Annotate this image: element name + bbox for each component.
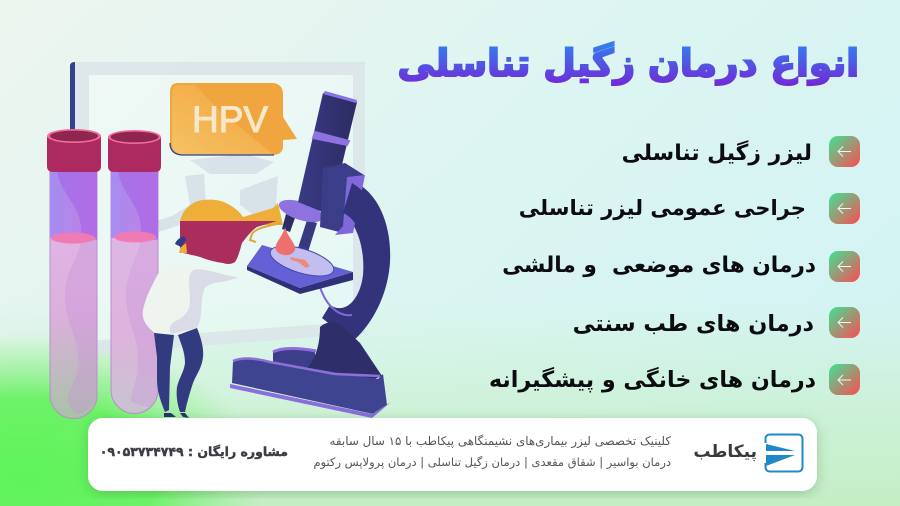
microscope tube <box>298 93 357 215</box>
list item 5: درمان های خانگی و پیشگیرانه <box>489 366 816 393</box>
icon: arrow button <box>829 193 860 224</box>
footer description line 1: کلینیک تخصصی لیزر بیماری‌های نشیمنگاهی پیکاطب با ۱۵ سال سابقه <box>330 434 671 449</box>
stage <box>247 266 353 294</box>
illustration: window frame <box>70 62 365 354</box>
phone consultation: مشاوره رایگان : ۰۹۰۵۳۷۳۴۷۴۹ <box>100 444 288 459</box>
list item 4: درمان های طب سنتی <box>573 311 814 337</box>
footer description line 2: درمان بواسیر | شقاق مقعدی | درمان زگیل تناسلی | درمان پرولاپس رکتوم <box>313 455 671 470</box>
sample drop <box>276 227 295 255</box>
microscope head <box>320 163 364 233</box>
list item 3: درمان های موضعی و مالشی <box>502 253 816 278</box>
footer card <box>88 418 817 491</box>
illustration: microscope <box>230 91 391 418</box>
lab coat <box>143 263 238 335</box>
HPV label: HPV <box>192 99 268 140</box>
objective lenses <box>282 214 295 232</box>
nosepiece ring <box>276 195 326 227</box>
icon: arrow button <box>829 307 860 338</box>
list item 2: جراحی عمومی لیزر تناسلی <box>519 195 806 220</box>
illustration: scientist <box>143 200 283 418</box>
microscope arm <box>322 180 390 342</box>
logo text: پیکاطب <box>693 442 757 462</box>
microscope base <box>273 348 315 372</box>
logo icon <box>762 434 802 472</box>
illustration: test tube left <box>47 129 101 418</box>
icon: arrow button <box>829 364 860 395</box>
list item 1: لیزر زگیل تناسلی <box>622 140 812 166</box>
icon: arrow button <box>829 251 860 282</box>
legs <box>154 328 203 412</box>
illustration: HPV speech bubble <box>170 83 297 155</box>
illustration: test tube right <box>108 130 161 414</box>
head and hat <box>180 200 283 225</box>
list item 1 <box>622 136 860 167</box>
icon: arrow button <box>829 136 860 167</box>
list item 2 <box>519 193 860 224</box>
title: انواع درمان زگیل تناسلی <box>398 41 859 85</box>
